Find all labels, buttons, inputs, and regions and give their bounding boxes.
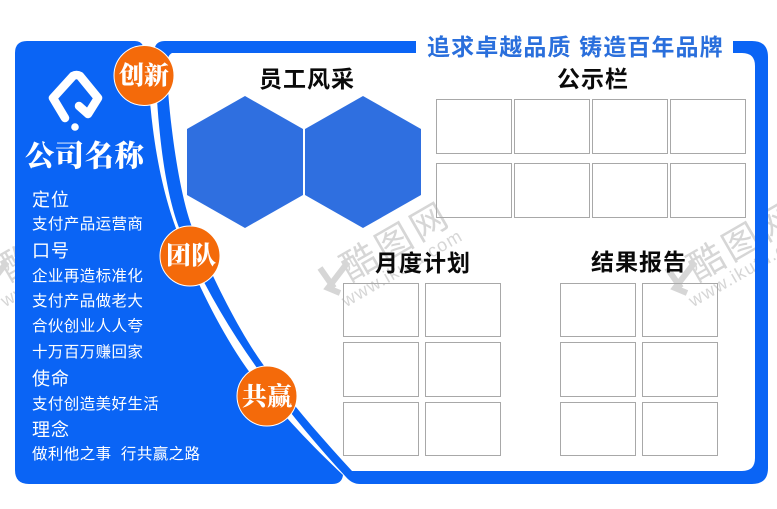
notice board grid <box>436 100 746 218</box>
text block: company values: 支付产品做老大 <box>32 292 143 310</box>
badge: 创新 <box>114 46 174 106</box>
panel: right frame <box>155 41 768 484</box>
text block: company values: 支付创造美好生活 <box>32 395 159 413</box>
watermark: center: 酷图网 <box>334 193 458 289</box>
text block: company values: 做利他之事 行共赢之路 <box>32 445 201 463</box>
text block: company values: 企业再造标准化 <box>32 267 143 285</box>
badge: 团队: 团队 <box>166 242 216 270</box>
badge: 共赢: 共赢 <box>242 382 292 411</box>
text block: company values: 定位 <box>32 190 70 210</box>
heading: 结果报告: 结果报告 <box>591 249 687 275</box>
hexagon photo frames <box>187 96 421 228</box>
watermark: center <box>319 193 466 311</box>
text block: company values: 合伙创业人人夸 <box>32 317 143 335</box>
text block: company values: 口号 <box>32 241 70 261</box>
company name: 公司名称 <box>25 140 146 173</box>
text block: company values: 使命 <box>32 369 70 389</box>
watermark: center: www.ikutu.com <box>337 226 465 311</box>
heading: 公示栏: 公示栏 <box>557 66 629 92</box>
heading: 员工风采: 员工风采 <box>259 66 355 92</box>
heading: 月度计划: 月度计划 <box>375 250 471 276</box>
text block: company values <box>32 190 201 463</box>
badge: 创新: 创新 <box>119 61 169 90</box>
monthly plan grid <box>344 284 500 456</box>
badge: 团队 <box>160 226 220 286</box>
text block: company values: 支付产品运营商 <box>32 215 143 233</box>
slogan heading: 追求卓越品质 铸造百年品牌 <box>427 34 724 60</box>
results report grid <box>560 284 718 456</box>
text block: company values: 十万百万赚回家 <box>32 343 143 361</box>
logo icon <box>53 75 98 131</box>
text block: company values: 理念 <box>32 419 70 440</box>
watermark: left: www.ikutu.com <box>0 226 124 311</box>
panel: left company panel <box>15 41 343 484</box>
badge: 共赢 <box>237 366 297 426</box>
